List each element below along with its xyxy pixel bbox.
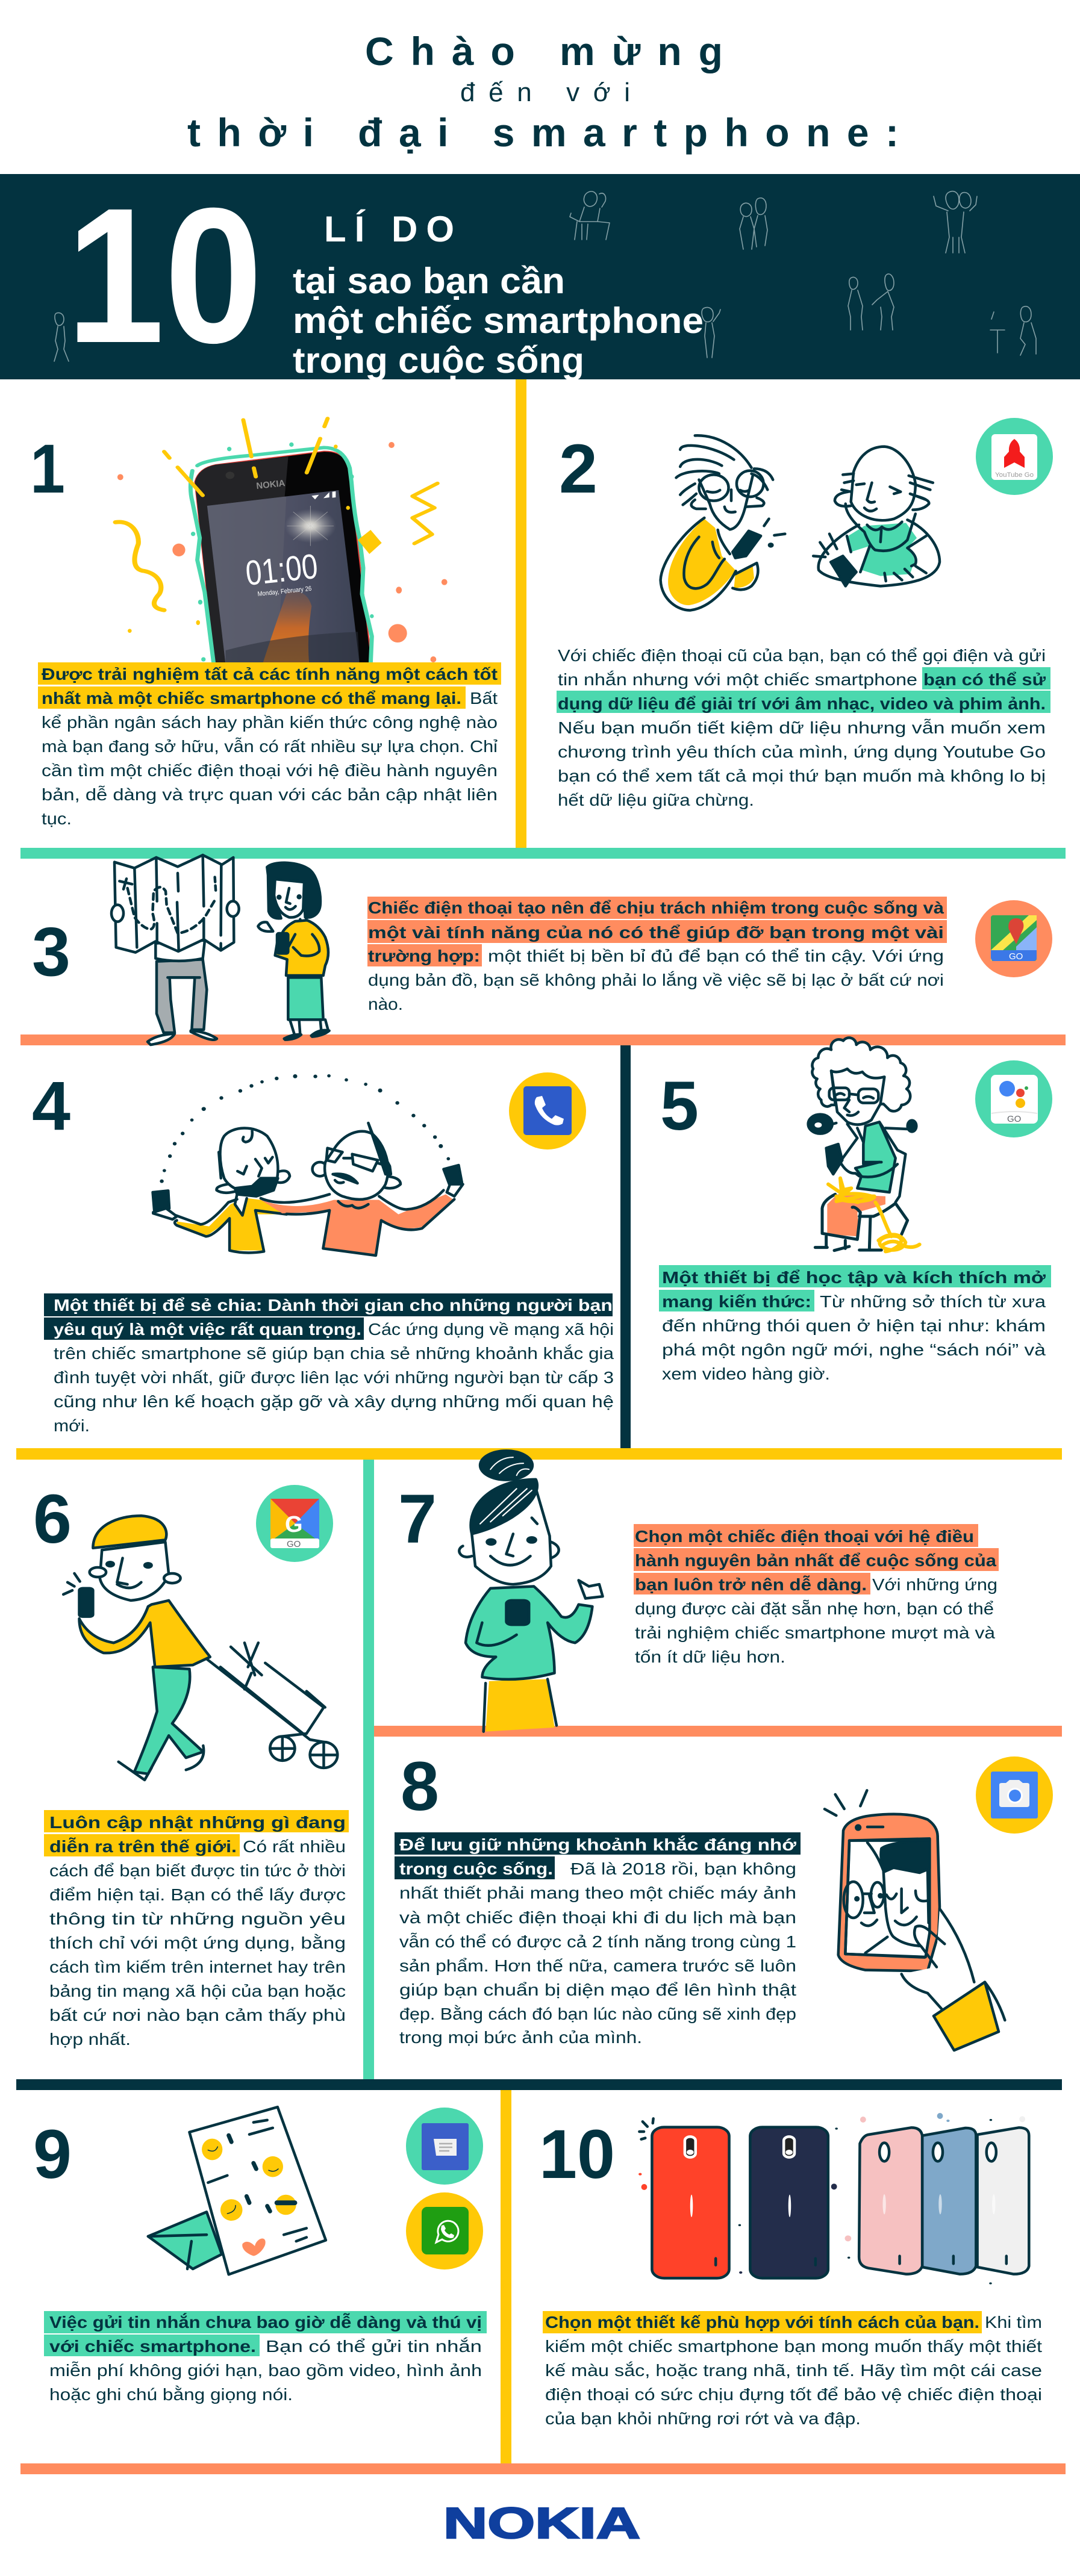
text block 2: chương trình yêu thích của mình, ứng dụng Youtube Go [558,742,1046,761]
text block 6: thích chỉ với một ứng dụng, bằng [49,1934,346,1952]
text block 6 [44,1810,349,2049]
text block 7: tốn ít dữ liệu hơn. [635,1647,785,1666]
text block 3: Chiếc điện thoại tạo nên để chịu trách nhiệm trong cuộc sống và [368,898,944,917]
text block 6: bất cứ nơi nào bạn cảm thấy phù [49,2006,346,2024]
text block 8: vẫn có thể có được cả 2 tính năng trong cùng 1 [399,1932,796,1951]
heading text: tại sao bạn cần [293,261,565,301]
panel 10 [539,2113,1042,2428]
icon: YouTube Go: YouTube Go [995,471,1034,479]
phone lock-screen text: NOKIA [256,478,286,491]
text block 1: kể phần ngân sách hay phần kiến thức công nghệ nào [42,713,498,732]
text block 9: với chiếc smartphone. [49,2337,256,2356]
title: Chào mừng [365,29,723,73]
illustration: hand holding phone selfie [825,1790,1005,2050]
number 5: 5 [660,1068,699,1145]
text block 10: kiếm một chiếc smartphone bạn mong muốn thấy một thiết [545,2337,1042,2356]
text block 1: Được trải nghiệm tất cả các tính năng một cách tốt [42,665,498,683]
text block 6: hợp nhất. [49,2030,131,2049]
text block 5: Một thiết bị để học tập và kích thích mở [662,1268,1046,1287]
illustration: grandmother knitting [808,1038,920,1251]
text block 8: đẹp. Bằng cách đó bạn lúc nào cũng sẽ xinh đẹp [399,2005,796,2023]
text block 4: trên chiếc smartphone sẽ giúp bạn chia sẻ những khoảnh khắc gia [54,1344,614,1363]
icon: Google Go: GO [287,1539,301,1549]
text block 8: giúp bạn chuẩn bị diện mạo để lên hình thật [399,1980,796,1999]
text block 4: yêu quý là một việc rất quan trọng. [54,1320,361,1339]
text block 4: cũng như lên kế hoạch gặp gỡ và xây dựng những mối quan hệ [54,1392,614,1411]
heading: LÍ DO: LÍ DO [324,209,454,249]
text block 6: điểm hiện tại. Bạn có thể lấy được [49,1885,346,1904]
text block 8: trong cuộc sống. [399,1859,553,1878]
text block 4: đình tuyệt vời nhất, giữ được liên lạc với những người bạn từ cấp 3 [54,1368,614,1387]
text block 9 [44,2311,487,2404]
icon: Google Assistant Go [975,1060,1052,1137]
text block 7: Chọn một chiếc điện thoại với hệ điều [635,1527,974,1546]
text block 8: Để lưu giữ những khoảnh khắc đáng nhớ [399,1835,796,1854]
illustration: man walking with golf cart [63,1516,337,1780]
title [187,29,899,155]
text block 2 [557,646,1050,809]
text block 9: miễn phí không giới hạn, bao gồm video, hình ảnh [49,2361,482,2380]
illustration: phones in five colours [638,2113,1029,2285]
text block 5: Từ những sở thích từ xưa [820,1292,1046,1311]
text block 7: hành nguyên bản nhất để cuộc sống của [635,1551,996,1570]
icon: Google Go [256,1485,333,1562]
text block 1 [38,662,501,828]
text block 6: cách tìm kiếm trên internet hay trên [49,1958,346,1976]
text block 10: Chọn một thiết kế phù hợp với tính cách của bạn. [545,2313,979,2332]
text block 8: và một chiếc điện thoại khi đi du lịch mà bạn [399,1908,796,1927]
text block 7: Với những ứng [872,1575,997,1594]
title: đến với [460,78,630,107]
text block 8 [395,1832,801,2047]
icon: phone app [509,1072,586,1150]
text block 2: Nếu bạn muốn tiết kiệm dữ liệu nhưng vẫn muốn xem [558,718,1046,737]
icon: Google Maps Go: GO [1009,951,1023,962]
text block 8: Đã là 2018 rồi, bạn không [570,1859,796,1878]
text block 3: một thiết bị bền bỉ đủ để bạn có thể tin cậy. Với ứng [488,947,944,965]
panel 1 [30,418,501,828]
text block 4 [44,1293,614,1435]
text block 7: bạn luôn trở nên dễ dàng. [635,1575,867,1594]
text block 10: kế màu sắc, hoặc trang nhã, tinh tế. Hãy tìm một cái case [545,2361,1042,2380]
text block 6: thông tin từ những nguồn yêu [49,1909,346,1928]
phone lock-screen text: Monday, February 26 [257,585,312,598]
decorative line figures [54,191,1036,361]
icon: messages [406,2108,483,2185]
text block 10 [543,2311,1042,2428]
heading text: trong cuộc sống [293,340,584,381]
text block 4: mới. [54,1416,90,1435]
phone lock-screen text [244,478,320,598]
text block 10: của bạn khỏi những rơi rớt và va đập. [545,2409,861,2428]
text block 6: Có rất nhiều [243,1837,346,1856]
illustration: woman with hair bun and phone [459,1451,603,1732]
illustration: man with map and woman with phone [111,855,329,1045]
number 6: 6 [33,1481,72,1558]
text block 5: phá một ngôn ngữ mới, nghe “sách nói” và [662,1340,1046,1359]
heading text [293,261,704,381]
text block 7 [634,1524,999,1666]
text block 3: một vài tính năng của nó có thể giúp đỡ bạn trong một vài [368,923,944,942]
illustration: phone with confetti [116,418,448,664]
illustration: two people with phones [661,435,940,610]
number 1: 1 [30,431,65,508]
text block 10: điện thoại có sức chịu đựng tốt để bảo vệ chiếc điện thoại [545,2385,1042,2404]
text block 6: diễn ra trên thế giới. [49,1837,237,1856]
icon: Google Assistant Go: GO [1007,1114,1021,1124]
text block 1: tục. [42,809,72,828]
text block 6: cách để bạn biết được tin tức ở thời [49,1861,346,1880]
text block 9: hoặc ghi chú bằng giọng nói. [49,2385,293,2404]
icon: WhatsApp [406,2192,483,2270]
number 8: 8 [401,1748,439,1825]
illustration: letter with emojis and envelope [148,2107,326,2274]
panel 6 [33,1481,349,2049]
panel 4 [32,1068,614,1435]
phone lock-screen text: 01:00 [244,547,320,593]
text block 2: Với chiếc điện thoại cũ của bạn, bạn có thể gọi điện và gửi [558,646,1046,665]
text block 3: trường hợp: [368,947,480,965]
icon: Google Maps Go [975,900,1052,977]
number 7: 7 [398,1481,437,1558]
header band [0,167,1080,383]
icon: YouTube Go [976,418,1053,495]
text block 1: nhất mà một chiếc smartphone có thể mang lại. [42,689,461,708]
text block 1: cần tìm một chiếc điện thoại với hệ điều hành nguyên [42,761,498,780]
text block 5: mang kiến thức: [662,1292,811,1311]
text block 5: đến những thói quen ở hiện tại như: khám [662,1316,1046,1335]
section dividers [16,379,1066,2474]
panel 8 [395,1748,1053,2050]
big number 10: 10 [66,167,263,383]
text block 2: bạn có thể xem tất cả mọi thứ bạn muốn mà không lo bị [558,767,1046,785]
logo: NOKIA: NOKIA [443,2500,640,2548]
text block 1: Bất [470,689,498,708]
panel 5 [659,1038,1052,1383]
text block 9: Việc gửi tin nhắn chưa bao giờ dễ dàng và thú vị [49,2313,482,2332]
text block 2: tin nhắn nhưng với một chiếc smartphone [558,670,917,689]
number 9: 9 [33,2116,72,2193]
text block 8: nhất thiết phải mang theo một chiếc máy ảnh [399,1884,796,1902]
text block 2: bạn có thể sử [923,670,1046,689]
panel 2 [557,418,1053,809]
text block 2: hết dữ liệu giữa chừng. [558,791,754,809]
text block 6: Luôn cập nhật những gì đang [49,1813,346,1832]
text block 4: Một thiết bị để sẻ chia: Dành thời gian cho những người bạn [54,1296,613,1314]
panel 3 [32,855,1052,1045]
text block 3: dụng bản đồ, bạn sẽ không phải lo lắng về việc sẽ bị lạc ở bất cứ nơi [368,971,944,989]
text block 3: nào. [368,995,403,1013]
text block 1: mà bạn đang sở hữu, vẫn có rất nhiều sự lựa chọn. Chỉ [42,737,498,756]
illustration: two men taking selfies [153,1074,463,1255]
heading text: một chiếc smartphone [293,300,704,341]
text block 7: dụng được cài đặt sẵn nhẹ hơn, bạn có thể [635,1599,994,1618]
text block 5: xem video hàng giờ. [662,1364,830,1383]
text block 7: trải nghiệm chiếc smartphone mượt mà và [635,1623,995,1642]
text block 6: bảng tin mạng xã hội của bạn hoặc [49,1982,346,2000]
number 3: 3 [32,913,70,991]
number 10: 10 [539,2116,615,2193]
text block 8: trong mọi bức ảnh của mình. [399,2028,642,2047]
text block 9: Bạn có thể gửi tin nhắn [266,2337,482,2356]
text block 2: dụng dữ liệu để giải trí với âm nhạc, video và phim ảnh. [558,694,1046,713]
panel 9 [33,2107,487,2404]
text block 3 [367,897,947,1013]
icon: Google Go: G [285,1512,303,1537]
text block 1: bản, dễ dàng và trực quan với các bản cập nhật liên [42,785,498,804]
text block 8: sản phẩm. Hơn thế nữa, camera trước sẽ luôn [399,1956,796,1975]
number 2: 2 [559,431,598,508]
text block 4: Các ứng dụng về mạng xã hội [368,1320,614,1339]
icon: camera app [976,1756,1053,1834]
text block 5 [659,1265,1051,1383]
title: thời đại smartphone: [187,110,899,155]
number 4: 4 [32,1068,70,1145]
text block 10: Khi tìm [985,2313,1042,2332]
panel 7 [398,1451,999,1732]
